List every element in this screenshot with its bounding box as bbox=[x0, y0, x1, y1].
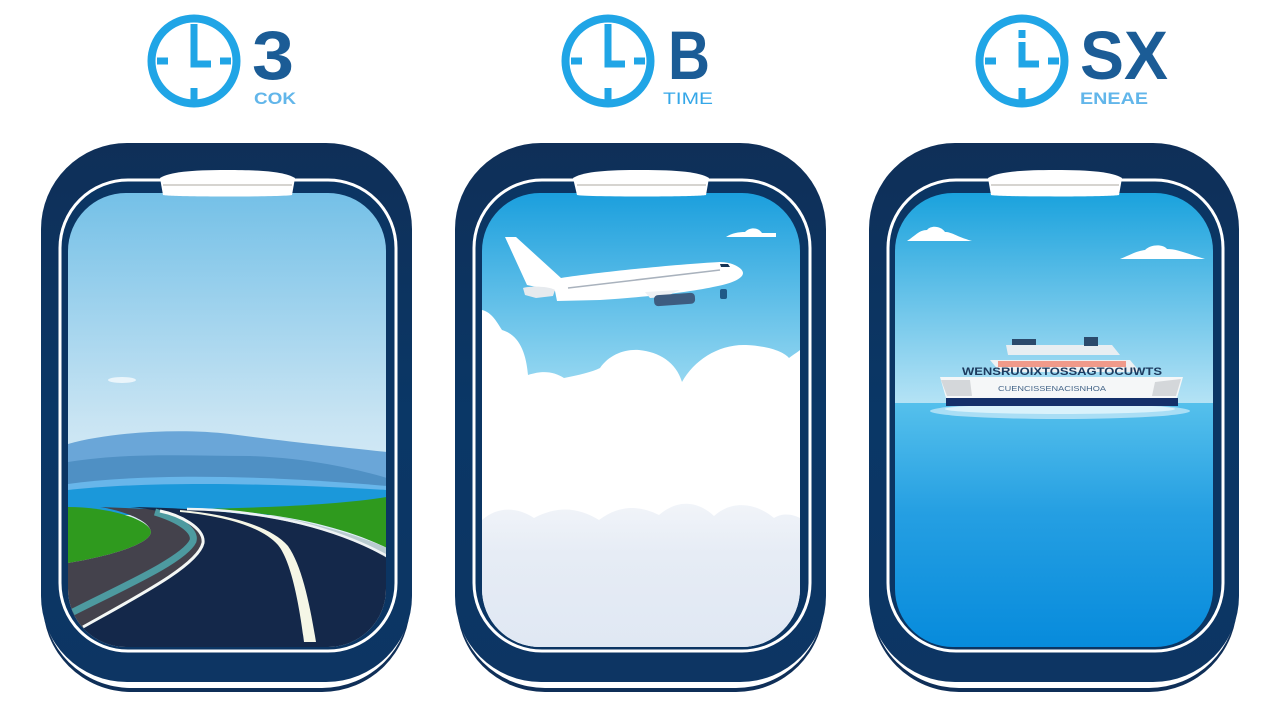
icon: clock bbox=[152, 18, 236, 104]
ferry lettering: WENSRUOIXTOSSAGTOCUWTS bbox=[962, 366, 1162, 378]
sea time label: ENEAE bbox=[1080, 89, 1148, 108]
window shade bbox=[160, 170, 295, 196]
ferry lettering: CUENCISSENACISNHOA bbox=[998, 386, 1106, 393]
panel: road window bbox=[41, 143, 412, 692]
icon: clock bbox=[566, 18, 650, 104]
scene: ferry at sea bbox=[895, 193, 1213, 647]
road time label: COK bbox=[254, 89, 297, 108]
road surface bbox=[75, 507, 387, 647]
cloud left bbox=[907, 227, 972, 241]
air time label: TIME bbox=[663, 89, 713, 108]
sea time value: SX bbox=[1080, 17, 1168, 94]
stat: sea travel time bbox=[980, 17, 1168, 108]
icon: airplane bbox=[505, 237, 743, 306]
teal verge bbox=[73, 512, 193, 612]
cloud layer bbox=[482, 310, 800, 647]
road time value: 3 bbox=[252, 17, 294, 94]
scene: aircraft over clouds bbox=[482, 193, 800, 647]
ferry lettering bbox=[962, 366, 1162, 393]
left grass bbox=[68, 507, 151, 563]
white edge line bbox=[83, 511, 203, 627]
stat: air travel time bbox=[566, 17, 713, 108]
left shoulder bbox=[68, 507, 202, 632]
cloud right bbox=[1120, 245, 1205, 259]
window frame bbox=[41, 143, 412, 692]
ferry bbox=[930, 337, 1190, 419]
stat: road travel time bbox=[152, 17, 297, 108]
right grass bbox=[211, 497, 386, 548]
icon: clock bbox=[980, 18, 1064, 104]
window shade bbox=[573, 170, 709, 196]
air time value: B bbox=[668, 17, 710, 94]
right road edge bbox=[220, 512, 386, 558]
panel: sea window bbox=[869, 143, 1239, 692]
scene: road and landscape bbox=[68, 193, 387, 647]
window frame bbox=[869, 143, 1239, 692]
small cloud bbox=[726, 228, 776, 237]
center line bbox=[180, 510, 316, 642]
panel: air window bbox=[455, 143, 826, 692]
window shade bbox=[988, 170, 1122, 196]
window frame bbox=[455, 143, 826, 692]
